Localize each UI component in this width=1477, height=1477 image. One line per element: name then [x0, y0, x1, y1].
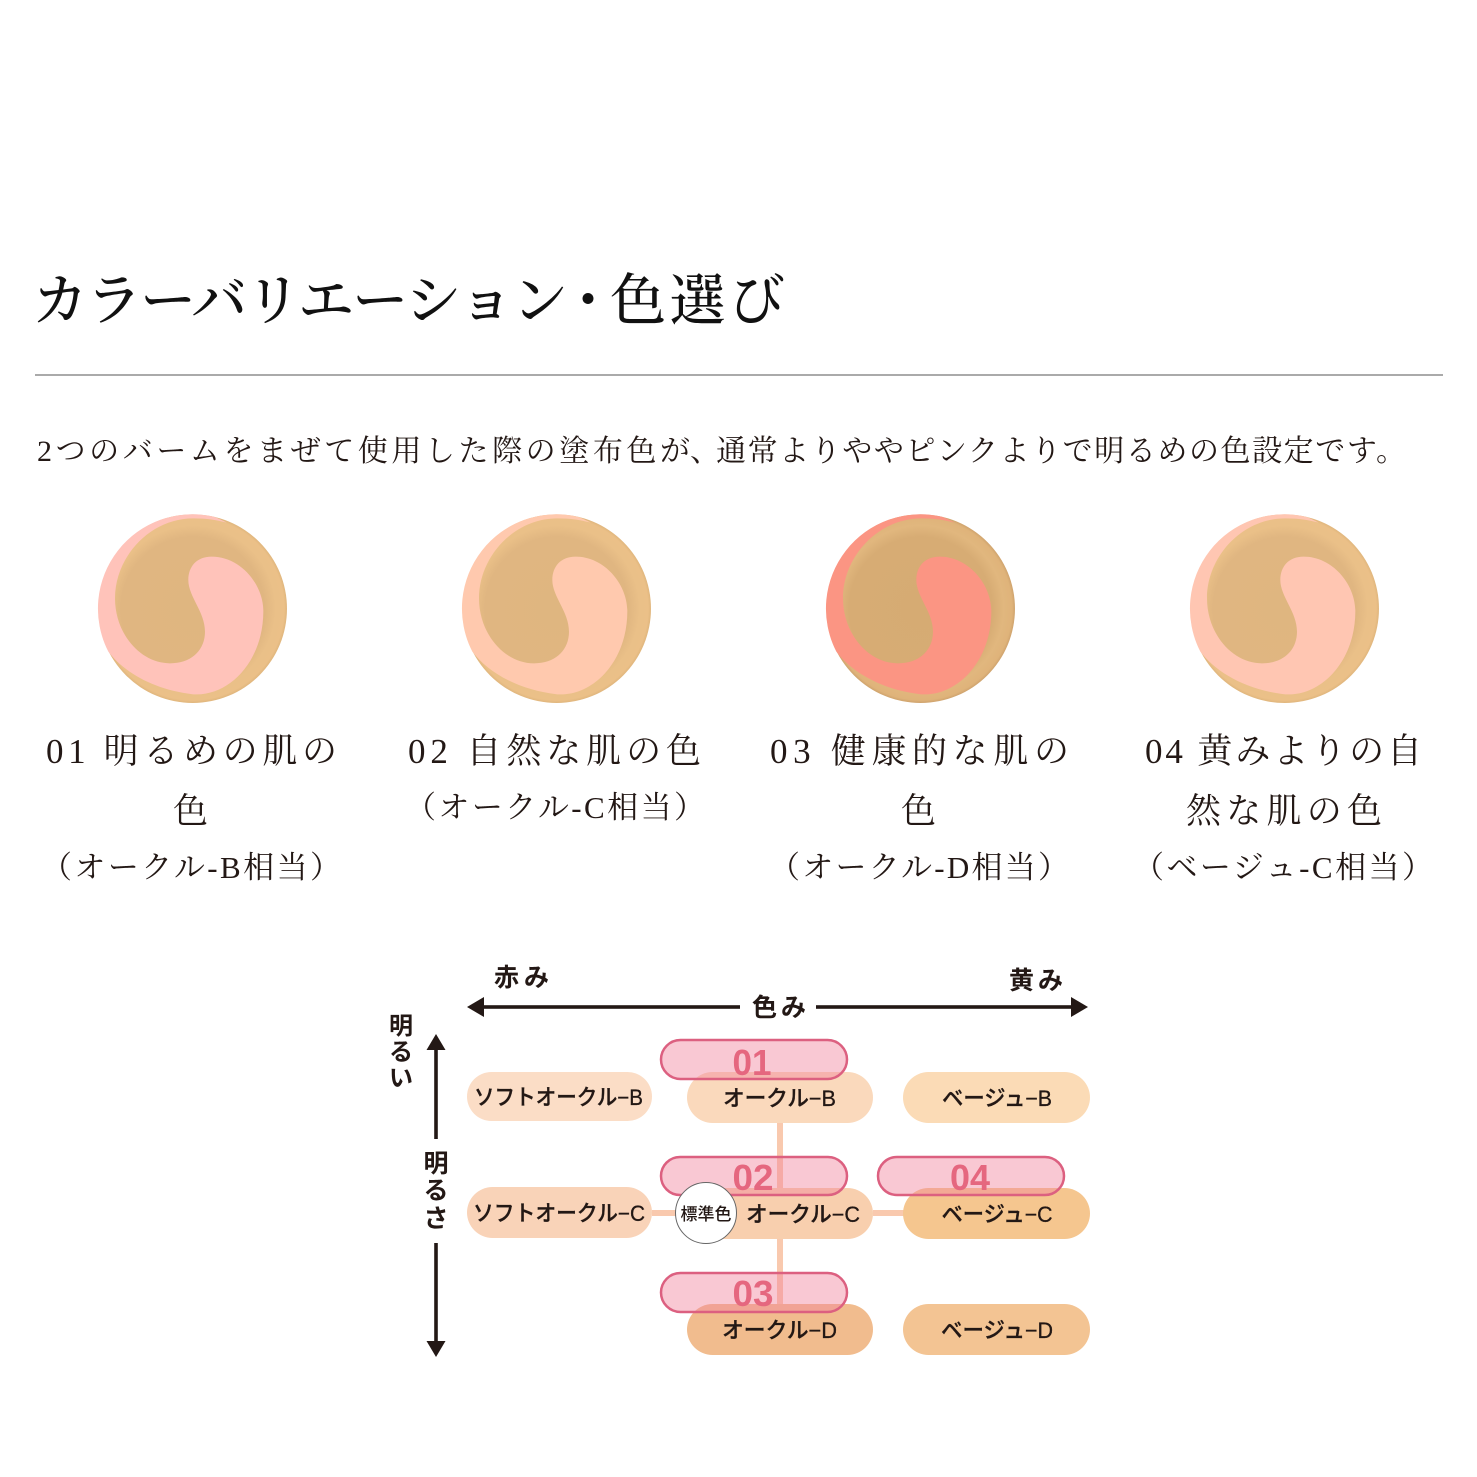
pill: soft ochre C: ソフトオークル−C	[473, 1201, 645, 1226]
label: shade 04: 04 黄みよりの自	[1145, 732, 1422, 771]
arrow: brightness axis up	[426, 1034, 446, 1139]
marker: 01	[661, 1040, 847, 1083]
pill: ochre C: オークル−C	[746, 1202, 860, 1227]
marker: 02	[661, 1157, 847, 1198]
axis label: bright: 明	[389, 1006, 413, 1041]
arrow: brightness axis down	[426, 1243, 446, 1357]
pill: beige D	[903, 1304, 1090, 1355]
icon: shade 01 balm swatch	[98, 514, 287, 703]
label: shade 01: 01 明るめの肌の	[46, 732, 337, 771]
marker: 02: 02	[732, 1157, 774, 1198]
description text: 2つのバームをまぜて使用した際の塗布色が	[37, 435, 690, 468]
label: shade 03: 色	[901, 792, 936, 831]
axis label: brightness: さ	[423, 1199, 449, 1235]
title: カラーバリエーション	[32, 257, 568, 337]
label: shade 03: 03 健康的な肌の	[770, 732, 1069, 771]
divider	[35, 374, 1443, 376]
pill: beige B: ベージュ−B	[942, 1086, 1052, 1111]
pill: beige B	[903, 1072, 1090, 1123]
description text: 通常よりややピンクよりで明るめの色設定です。	[716, 435, 1406, 468]
axis label: brightness: る	[423, 1171, 449, 1207]
label: shade 03	[769, 732, 1069, 885]
description text	[37, 435, 1406, 468]
pill: soft ochre C	[467, 1187, 652, 1238]
badge: standard colour	[676, 1182, 736, 1244]
axis label: bright: い	[389, 1058, 413, 1093]
label: shade 03: （オークル-D相当）	[769, 850, 1069, 885]
pill: ochre D	[687, 1304, 873, 1355]
axis label: brightness: 明	[423, 1144, 449, 1180]
badge: standard colour: 標準色	[680, 1200, 732, 1225]
pill: beige C: ベージュ−C	[942, 1202, 1053, 1227]
axis label: bright: る	[389, 1032, 413, 1067]
label: shade 02: 02 自然な肌の色	[408, 732, 701, 771]
marker: 03	[661, 1273, 847, 1314]
marker: 03: 03	[732, 1273, 774, 1314]
label: shade 04: 然な肌の色	[1186, 792, 1382, 831]
pill: ochre B	[687, 1072, 873, 1123]
label: shade 01: （オークル-B相当）	[41, 850, 341, 885]
pill: ochre D: オークル−D	[722, 1318, 837, 1343]
pill: ochre B: オークル−B	[723, 1086, 836, 1111]
pill: beige D: ベージュ−D	[941, 1318, 1053, 1343]
description text: 、	[690, 435, 720, 468]
marker: 01: 01	[732, 1042, 772, 1083]
title: 色選び	[610, 257, 785, 337]
pill: beige C	[903, 1188, 1090, 1239]
axis label: yellow: 黄み	[1009, 961, 1063, 997]
pill: soft ochre B: ソフトオークル−B	[474, 1085, 643, 1110]
icon: shade 03 balm swatch	[826, 514, 1015, 703]
label: shade 02	[405, 732, 705, 825]
icon: shade 04 balm swatch	[1190, 514, 1379, 703]
label: shade 04	[1133, 732, 1433, 885]
marker: 04	[878, 1157, 1064, 1198]
pill: soft ochre B	[467, 1072, 652, 1121]
arrow: hue axis right	[816, 997, 1088, 1017]
label: shade 02: （オークル-C相当）	[405, 790, 705, 825]
connector lines	[652, 1122, 904, 1304]
label: shade 04: （ベージュ-C相当）	[1133, 850, 1433, 885]
pill: ochre C	[687, 1188, 873, 1239]
label: shade 01	[41, 732, 341, 885]
axis label: red: 赤み	[494, 958, 549, 994]
icon: shade 02 balm swatch	[462, 514, 651, 703]
chart: colour position map	[389, 958, 1090, 1357]
label: shade 01: 色	[173, 792, 208, 831]
axis label: hue: 色み	[752, 988, 806, 1024]
title: ・	[560, 257, 616, 337]
arrow: hue axis left	[467, 997, 740, 1017]
marker: 04: 04	[950, 1157, 990, 1198]
